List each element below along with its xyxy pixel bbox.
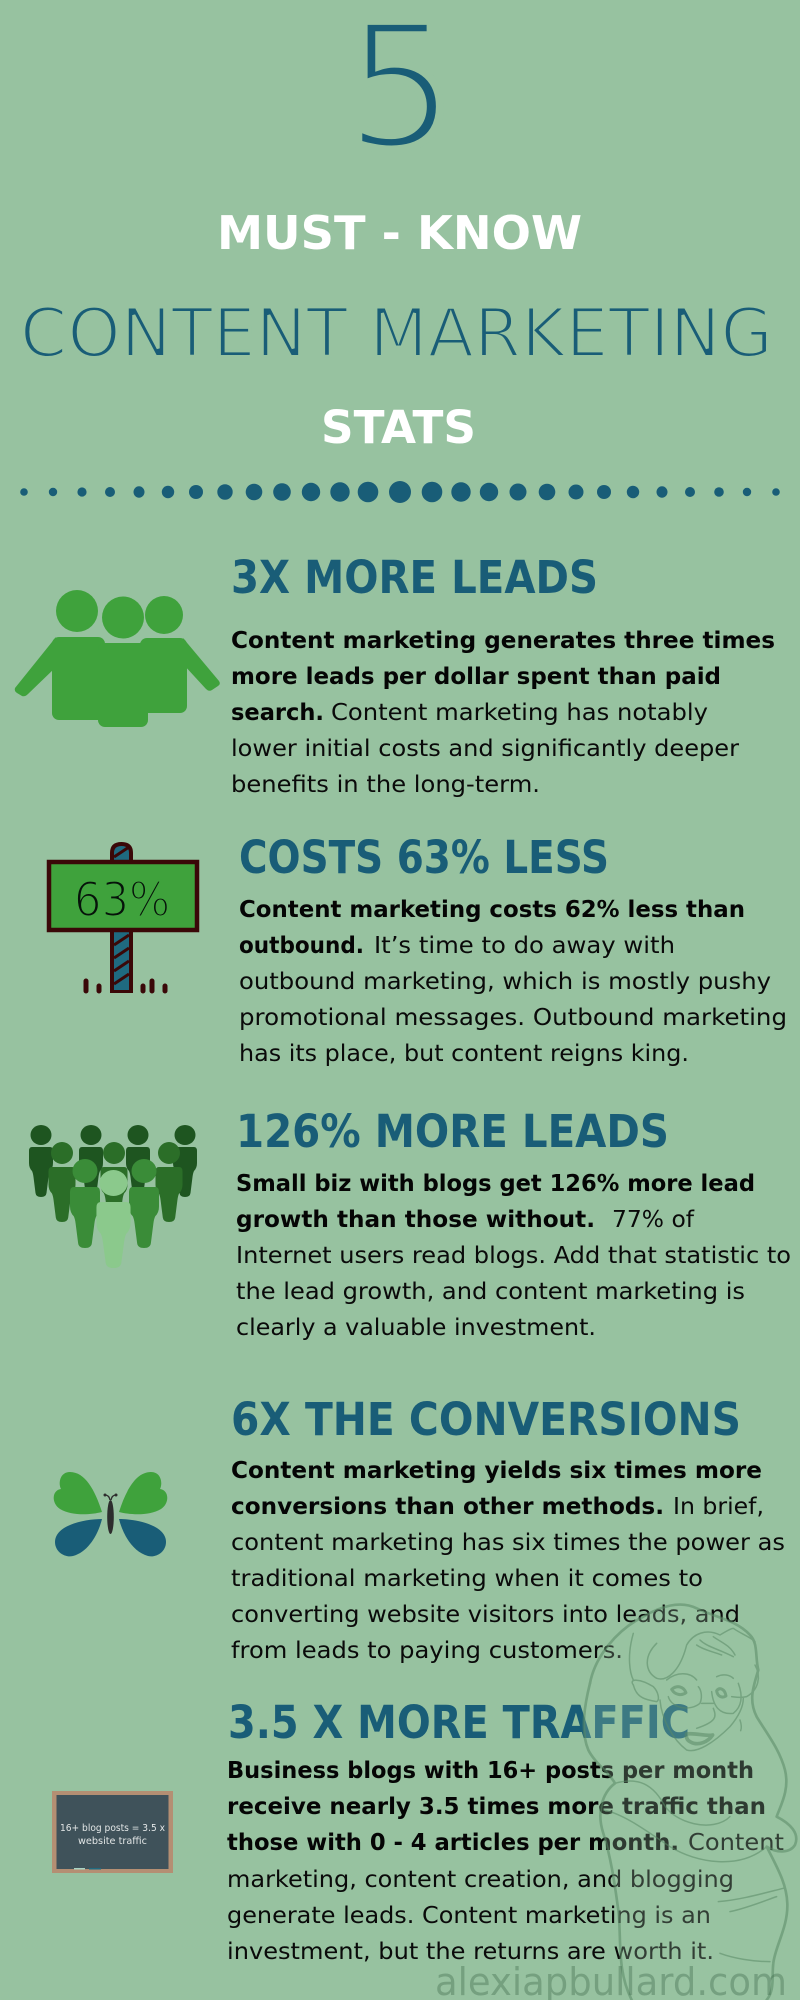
body text 3: Small biz with blogs get 126% more lead: [236, 1169, 755, 1197]
body text 2: Content marketing costs 62% less than: [239, 895, 745, 923]
heading 1: 3X MORE LEADS: [231, 551, 598, 604]
body text 1: benefits in the long-term.: [231, 770, 540, 798]
body text 5: receive nearly 3.5 times more traffic than: [227, 1792, 766, 1820]
title block: [20, 0, 773, 454]
section 3: blog lead growth: [236, 1105, 791, 1341]
body text 4: traditional marketing when it comes to: [231, 1564, 703, 1592]
body text 2: promotional messages. Outbound marketing: [239, 1003, 787, 1031]
dotted divider: [20, 481, 780, 503]
icon: butterfly: [54, 1472, 167, 1556]
body text 1: Content marketing has notably: [331, 698, 708, 726]
body text 1: more leads per dollar spent than paid: [231, 662, 721, 690]
body text 3: [236, 1169, 791, 1341]
title line: must-know: MUST - KNOW: [217, 206, 582, 260]
body text 2: [239, 895, 787, 1067]
body text 2: It’s time to do away with: [374, 931, 675, 959]
body text 1: [231, 626, 775, 798]
chalkboard text: 16+ blog posts = 3.5 x: [60, 1823, 165, 1834]
body text 5: [227, 1756, 784, 1965]
heading 5: 3.5 X MORE TRAFFIC: [228, 1696, 690, 1749]
icon: chalkboard: [52, 1791, 173, 1873]
section 4: conversions: [231, 1393, 785, 1664]
body text 4: In brief,: [673, 1492, 764, 1520]
icon: crowd of people: [29, 1125, 197, 1268]
sign value: 63%: [74, 873, 170, 928]
body text 1: Content marketing generates three times: [231, 626, 775, 654]
body text 2: outbound.: [239, 931, 364, 959]
title line: stats: STATS: [321, 401, 476, 454]
section 5: traffic: [227, 1696, 784, 1965]
body text 4: [231, 1456, 785, 1664]
heading 3: 126% MORE LEADS: [236, 1105, 669, 1158]
body text 4: converting website visitors into leads, and: [231, 1600, 740, 1628]
body text 4: conversions than other methods.: [231, 1492, 664, 1520]
heading 4: 6X THE CONVERSIONS: [231, 1393, 741, 1446]
heading 2: COSTS 63% LESS: [239, 831, 609, 884]
body text 5: those with 0 - 4 articles per month.: [227, 1828, 679, 1856]
body text 5: marketing, content creation, and blogging: [227, 1865, 734, 1893]
body text 5: generate leads. Content marketing is an: [227, 1901, 711, 1929]
body text 4: Content marketing yields six times more: [231, 1456, 762, 1484]
body text 2: outbound marketing, which is mostly pushy: [239, 967, 771, 995]
chalkboard text: website traffic: [78, 1836, 147, 1847]
body text 3: Internet users read blogs. Add that statistic to: [236, 1241, 791, 1269]
body text 1: search.: [231, 698, 324, 726]
section 2: costs less: [239, 831, 787, 1067]
icon: three people: [15, 590, 220, 727]
body text 4: from leads to paying customers.: [231, 1636, 623, 1664]
body text 3: clearly a valuable investment.: [236, 1313, 596, 1341]
section 1: three times more leads: [231, 551, 775, 798]
body text 5: Business blogs with 16+ posts per month: [227, 1756, 754, 1784]
title line: content marketing: CONTENT MARKETING: [20, 294, 773, 374]
body text 4: content marketing has six times the power as: [231, 1528, 785, 1556]
body text 3: the lead growth, and content marketing is: [236, 1277, 745, 1305]
body text 2: has its place, but content reigns king.: [239, 1039, 689, 1067]
body text 3: 77% of: [612, 1205, 695, 1233]
body text 5: investment, but the returns are worth it.: [227, 1937, 714, 1965]
watermark: sketch of woman: [584, 1605, 796, 2000]
icon: 63% signpost: [49, 842, 197, 993]
body text 1: lower initial costs and significantly deeper: [231, 734, 739, 762]
body text 3: growth than those without.: [236, 1205, 595, 1233]
chalkboard text: [60, 1823, 165, 1847]
body text 5: Content: [688, 1828, 784, 1856]
